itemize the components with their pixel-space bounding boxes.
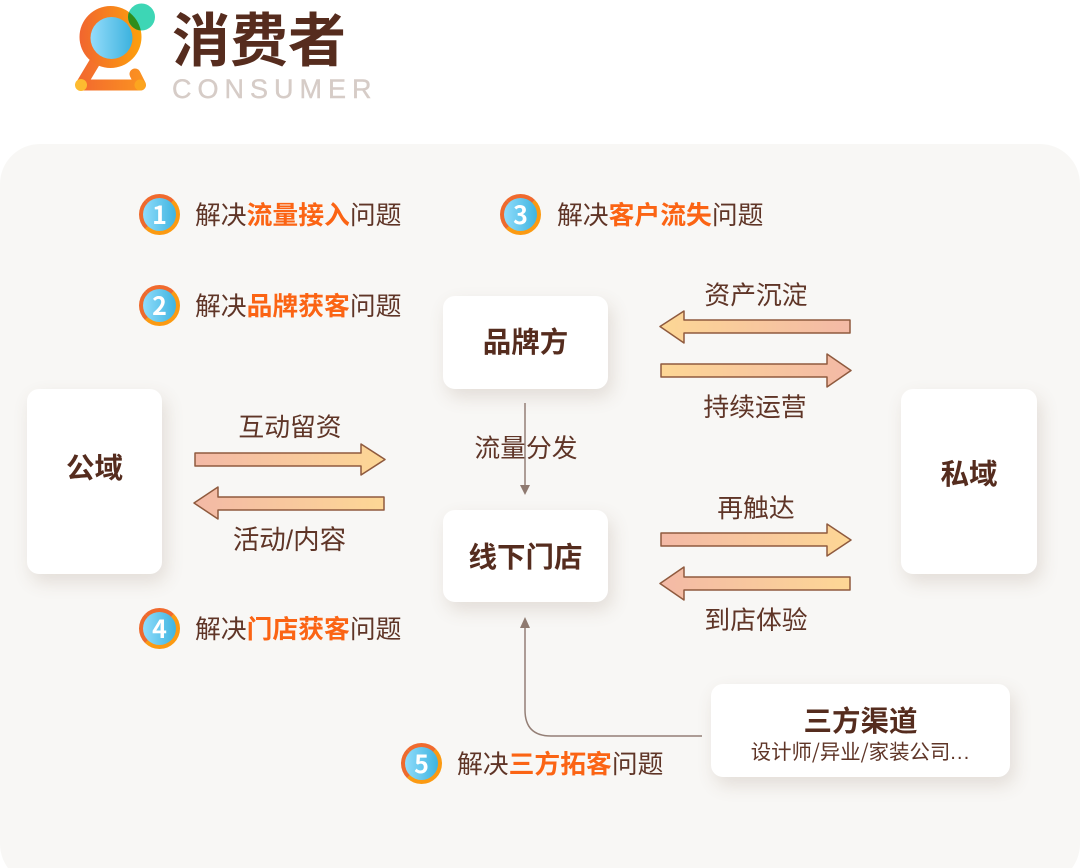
card: 三方渠道: [711, 684, 1010, 777]
label: 资产沉淀: 资产沉淀: [704, 282, 808, 310]
problem 2: 2: [152, 287, 167, 323]
problem 5: [401, 743, 663, 784]
card: 线下门店: [443, 510, 608, 602]
problem 4: 解决门店获客问题: [195, 616, 401, 644]
label: 互动留资: 互动留资: [238, 414, 342, 442]
title: 消费者: [172, 9, 346, 74]
problem 5: 5: [414, 745, 429, 781]
logo icon: [75, 4, 155, 91]
label: 流量分发: 流量分发: [474, 435, 578, 463]
problem 3: [500, 194, 763, 235]
problem 2: 解决品牌获客问题: [195, 293, 401, 321]
card: 三方渠道: 三方渠道: [803, 699, 918, 740]
card: 品牌方: 品牌方: [483, 320, 568, 361]
card: 三方渠道: 设计师/异业/家装公司...: [751, 735, 970, 765]
problem 1: 1: [152, 196, 167, 232]
card: 品牌方: [443, 296, 608, 389]
label: 持续运营: 持续运营: [703, 394, 807, 422]
problem 1: 解决流量接入问题: [195, 202, 401, 230]
label: 到店体验: 到店体验: [704, 607, 808, 635]
label: 活动/内容: 活动/内容: [233, 525, 346, 555]
problem 3: 3: [513, 196, 528, 232]
problem 1: [139, 194, 401, 235]
card: 公域: [27, 389, 162, 574]
label: 再触达: 再触达: [717, 495, 795, 523]
problem 2: [139, 285, 401, 326]
problem 5: 解决三方拓客问题: [457, 751, 663, 779]
problem 4: 4: [152, 610, 167, 646]
subtitle: CONSUMER: [172, 74, 378, 104]
card: 线下门店: 线下门店: [468, 534, 582, 576]
card: 公域: 公域: [66, 446, 123, 487]
card: 私域: 私域: [940, 452, 998, 493]
card: 私域: [901, 389, 1037, 574]
problem 3: 解决客户流失问题: [557, 202, 763, 230]
problem 4: [139, 608, 401, 649]
